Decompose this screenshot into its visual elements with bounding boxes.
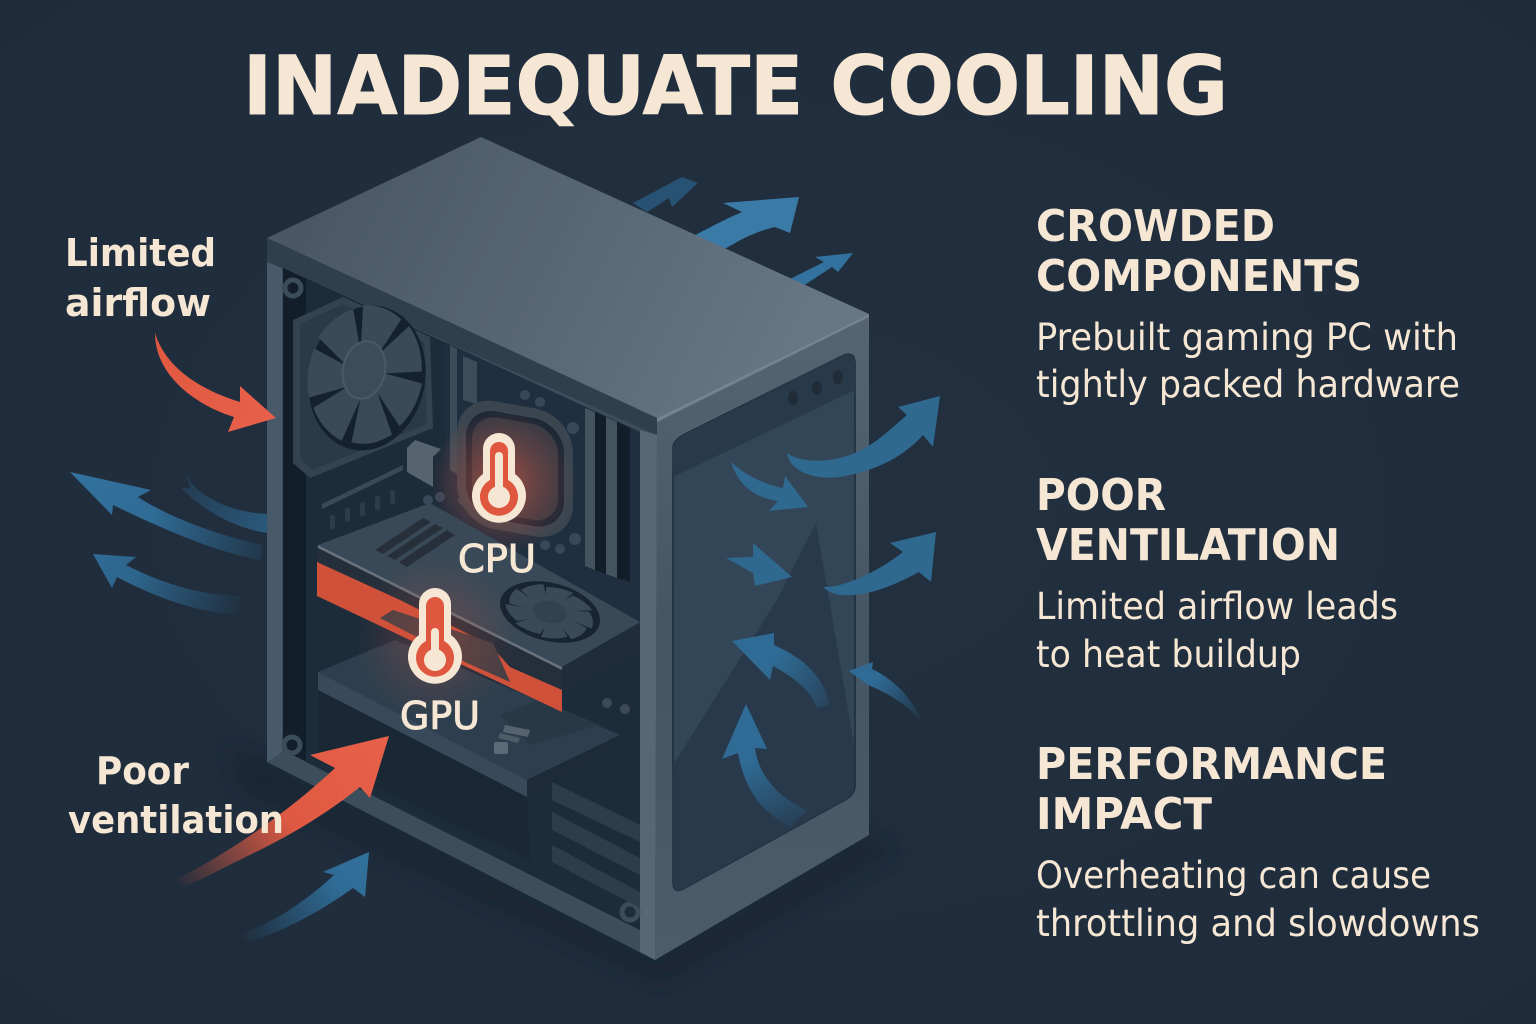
text block: crowded components: COMPONENTS <box>1036 251 1362 302</box>
label: poor ventilation: ventilation <box>68 798 284 842</box>
label: poor ventilation <box>68 749 284 842</box>
heat glow: CPU <box>430 410 574 554</box>
red side stripe <box>317 562 562 712</box>
case interior <box>283 268 640 930</box>
arrow: poor ventilation <box>175 736 389 888</box>
label: limited airflow <box>65 231 216 325</box>
chip block <box>407 440 441 487</box>
screw holes <box>285 280 301 296</box>
expansion ridge <box>322 465 403 529</box>
gpu fan <box>493 572 607 652</box>
text block: performance impact <box>1036 739 1480 945</box>
text block: performance impact: IMPACT <box>1036 789 1212 840</box>
motherboard <box>445 342 640 650</box>
drive bays <box>552 782 640 908</box>
text block: crowded components <box>1036 201 1460 406</box>
airflow arrows: left <box>70 469 267 615</box>
CPU cooler <box>457 395 573 543</box>
shadow under case <box>225 745 895 985</box>
case side frame <box>267 262 657 960</box>
label: poor ventilation: Poor <box>96 749 189 793</box>
airflow arrows: front panel <box>722 396 940 827</box>
label: GPU: GPU <box>400 694 480 738</box>
icon: CPU thermometer <box>472 433 526 523</box>
text block: crowded components: CROWDED <box>1036 201 1275 252</box>
board components <box>423 390 581 554</box>
label: CPU: CPU <box>458 537 536 581</box>
PC case <box>267 137 869 960</box>
arrow: bottom blue airflow <box>240 852 369 942</box>
RAM slots <box>585 408 630 582</box>
case top edge <box>267 238 657 435</box>
text block: performance impact: throttling and slowdowns <box>1036 902 1480 945</box>
text block: poor ventilation: POOR <box>1036 470 1166 521</box>
case front face <box>655 314 869 960</box>
text block: poor ventilation <box>1036 470 1398 676</box>
vent slats <box>375 518 455 567</box>
lower drive tray <box>318 640 630 860</box>
label: limited airflow: airflow <box>65 281 211 325</box>
rear fan <box>291 295 439 478</box>
text block: poor ventilation: Limited airflow leads <box>1036 585 1398 628</box>
heat glow: GPU <box>355 560 515 720</box>
graphics card <box>317 503 640 712</box>
text block: performance impact: PERFORMANCE <box>1036 739 1387 790</box>
rail strips <box>450 345 457 474</box>
icon: GPU thermometer <box>408 588 462 684</box>
front panel <box>673 354 855 890</box>
text block: performance impact: Overheating can cause <box>1036 854 1431 897</box>
text block: crowded components: tightly packed hardware <box>1036 363 1460 406</box>
title: INADEQUATE COOLING <box>243 40 1228 134</box>
arrow: limited airflow <box>155 333 276 432</box>
text block: poor ventilation: to heat buildup <box>1036 633 1301 676</box>
case top face <box>267 137 869 418</box>
text block: crowded components: Prebuilt gaming PC with <box>1036 316 1458 359</box>
text block: poor ventilation: VENTILATION <box>1036 520 1340 571</box>
label: limited airflow: Limited <box>65 231 216 275</box>
icon: top airflow arrows <box>633 177 853 288</box>
